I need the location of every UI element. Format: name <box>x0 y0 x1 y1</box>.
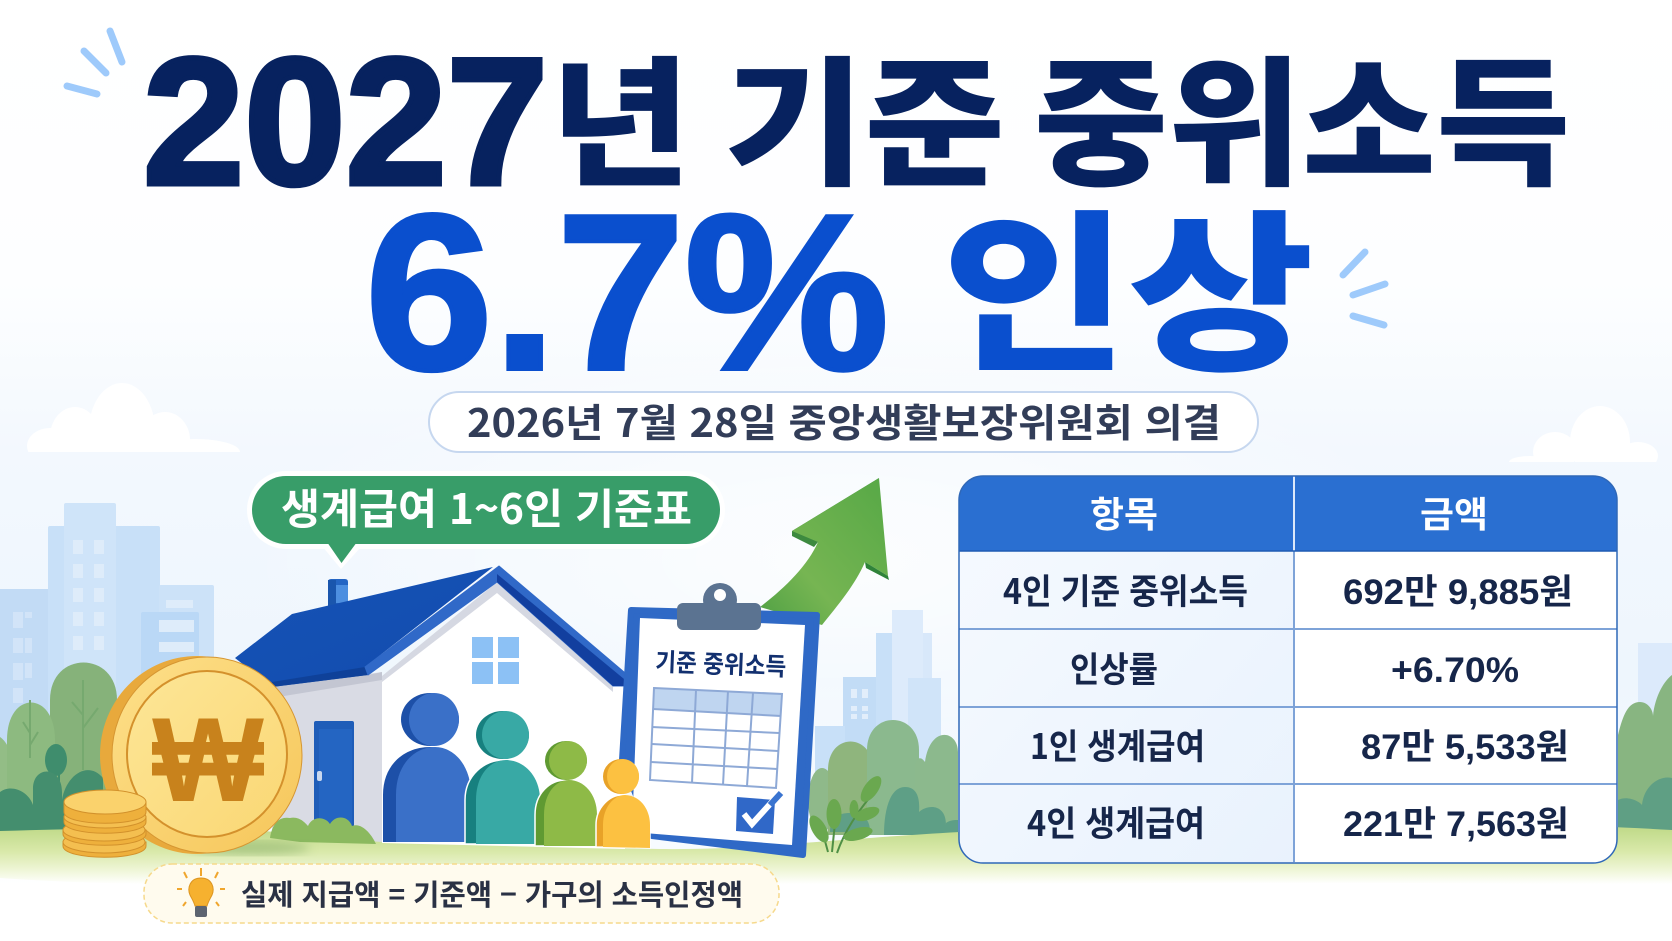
house <box>235 566 625 849</box>
table rows: 인상률 <box>1070 642 1158 693</box>
main title line 1: 중위소득 <box>1034 13 1570 215</box>
table header: 금액 <box>1420 486 1488 538</box>
main title line 1: 년 <box>550 13 691 215</box>
table rows: 87만 5,533원 <box>1361 728 1569 767</box>
table header: 항목 <box>1090 486 1158 538</box>
table rows: +6.70% <box>1391 651 1519 690</box>
plant <box>805 773 885 853</box>
clipboard clip <box>677 583 761 630</box>
table rows: 1인 생계급여 <box>1030 719 1205 770</box>
gable wall <box>382 582 625 849</box>
cloud right <box>1509 406 1658 462</box>
won symbol: ₩ <box>152 693 265 827</box>
person blue <box>383 693 471 842</box>
person yellow <box>596 759 650 848</box>
table rows <box>1003 564 1573 847</box>
formula note <box>144 864 779 923</box>
speech bubble: 생계급여 1~6인 기준표 <box>281 476 692 537</box>
growth arrow <box>760 478 889 625</box>
roof gable trim <box>365 566 624 686</box>
side wall <box>272 672 382 842</box>
check box <box>736 793 781 834</box>
table header <box>1090 486 1488 538</box>
skyline far right <box>1638 643 1672 773</box>
skyline middle right <box>815 610 941 823</box>
trees middle right <box>808 720 958 835</box>
person green <box>535 741 597 846</box>
main title line 1: 기준 <box>724 13 1005 215</box>
cloud left <box>27 385 240 452</box>
door <box>314 721 354 829</box>
clipboard mini table <box>650 688 782 788</box>
main title line 2 <box>365 155 1314 417</box>
main title line 2: 6.7% <box>365 169 889 417</box>
table rows: 692만 9,885원 <box>1343 573 1573 612</box>
ground <box>0 822 1672 888</box>
small coin stack <box>63 790 146 857</box>
sparkle right <box>1343 252 1385 325</box>
clipboard title: 기준 중위소득 <box>655 643 787 684</box>
shrubs <box>270 817 376 844</box>
speech bubble <box>247 471 725 569</box>
clipboard <box>622 583 817 855</box>
main title line 2: 인상 <box>942 155 1314 406</box>
data table <box>959 476 1617 863</box>
roof <box>235 567 493 687</box>
person teal <box>465 711 540 844</box>
window <box>472 637 519 684</box>
chimney <box>328 579 348 612</box>
main title line 1 <box>143 13 1570 223</box>
trees left <box>0 662 117 837</box>
sparkle left <box>67 31 122 94</box>
trees far right <box>1618 675 1672 832</box>
main title line 1: 2027 <box>143 21 548 223</box>
big won coin <box>100 656 310 855</box>
icon: light bulb <box>177 868 225 917</box>
skyline left <box>0 503 214 802</box>
table rows: 4인 기준 중위소득 <box>1003 564 1248 615</box>
table rows: 4인 생계급여 <box>1027 796 1205 847</box>
formula note: 실제 지급액 = 기준액 − 가구의 소득인정액 <box>241 872 743 914</box>
date pill: 2026년 7월 28일 중앙생활보장위원회 의결 <box>467 393 1221 449</box>
people group <box>383 693 650 848</box>
table rows: 221만 7,563원 <box>1343 805 1569 844</box>
